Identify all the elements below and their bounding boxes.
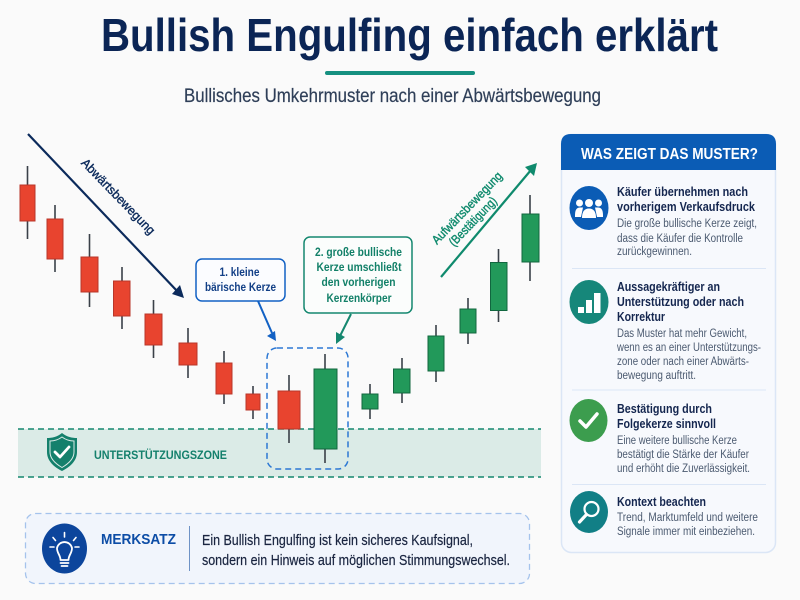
item: bestätigung: Bestätigung durch	[617, 402, 712, 416]
item: aussagekräftiger	[570, 280, 761, 382]
subtitle: Bullisches Umkehrmuster nach einer Abwärtsbewegung	[184, 86, 601, 107]
panel: was zeigt das muster	[561, 134, 776, 552]
title underline	[325, 71, 475, 75]
panel header	[561, 134, 776, 170]
merksatz text: sondern ein Hinweis auf möglichen Stimmungswechsel.	[202, 553, 510, 569]
item: kontext: Trend, Marktumfeld und weitere	[617, 512, 758, 524]
icon: light bulb	[42, 524, 87, 574]
uptrend arrow	[441, 163, 537, 277]
item: aussagekräftiger: zone oder nach einer Abwärts-	[617, 356, 749, 368]
callout: small bearish candle	[196, 259, 285, 301]
item: kontext: Kontext beachten	[617, 495, 706, 509]
item: aussagekräftiger: Unterstützung oder nach	[617, 295, 744, 309]
bullish candles in uptrend	[362, 195, 539, 419]
callout: large bullish candle: Kerzenkörper	[326, 291, 392, 305]
panel header: WAS ZEIGT DAS MUSTER?	[581, 146, 758, 163]
item: bestätigung: und erhöht die Zuverlässigkeit.	[617, 463, 750, 475]
icon: bar chart	[570, 280, 608, 324]
item: käufer übernehmen: dass die Käufer die Kontrolle	[617, 233, 743, 245]
callout: small bearish candle: 1. kleine	[220, 265, 260, 279]
item: bestätigung: Eine weitere bullische Kerze	[617, 435, 737, 447]
icon: shield with check	[47, 433, 77, 471]
icon: people	[570, 186, 608, 230]
item: käufer übernehmen: Die große bullische Kerze zeigt,	[617, 218, 757, 230]
callout: large bullish candle: den vorherigen	[322, 275, 396, 289]
small bearish candle	[278, 375, 300, 443]
item: bestätigung	[570, 399, 750, 475]
icon: magnifier	[570, 491, 608, 533]
support zone	[18, 429, 541, 477]
engulfing highlight box	[267, 348, 348, 469]
item: käufer übernehmen: zurückgewinnen.	[617, 246, 692, 258]
callout: large bullish candle: Kerze umschließt	[316, 260, 402, 274]
item: kontext	[570, 491, 758, 538]
arrow: callout 2 to candle	[336, 314, 351, 344]
item: aussagekräftiger: Das Muster hat mehr Gewicht,	[617, 328, 747, 340]
arrow: callout 1 to candle	[258, 301, 276, 341]
panel: merksatz	[26, 514, 530, 584]
uptrend label: Aufwärtsbewegung	[429, 169, 505, 247]
callout: small bearish candle: bärische Kerze	[205, 280, 276, 294]
callout: large bullish candle	[304, 237, 412, 313]
merksatz text	[202, 533, 510, 569]
title: Bullish Engulfing einfach erklärt	[101, 9, 718, 61]
callout: large bullish candle: 2. große bullische	[315, 245, 402, 259]
uptrend label: (Bestätigung)	[446, 194, 500, 249]
item: käufer übernehmen	[570, 185, 757, 258]
item: aussagekräftiger: Korrektur	[617, 310, 665, 324]
large bullish engulfing candle	[314, 354, 337, 463]
item: käufer übernehmen: vorherigem Verkaufsdruck	[617, 200, 755, 214]
item: bestätigung: Folgekerze sinnvoll	[617, 417, 716, 431]
item: aussagekräftiger: Aussagekräftiger an	[617, 280, 720, 294]
icon: check	[570, 399, 608, 442]
item: aussagekräftiger: wenn es an einer Unterstützungs-	[616, 342, 761, 354]
item: kontext: Signale immer mit einbeziehen.	[617, 526, 755, 538]
item: käufer übernehmen: Käufer übernehmen nach	[617, 185, 748, 199]
downtrend label: Abwärtsbewegung	[78, 156, 158, 238]
downtrend arrow	[28, 134, 184, 298]
merksatz text: Ein Bullish Engulfing ist kein sicheres Kaufsignal,	[202, 533, 473, 549]
merksatz label: MERKSATZ	[101, 532, 176, 548]
bearish candles in downtrend	[20, 166, 260, 419]
support zone label: UNTERSTÜTZUNGSZONE	[94, 447, 227, 462]
item: bestätigung: bestätigt die Stärke der Käufer	[617, 449, 749, 461]
item: aussagekräftiger: bewegung auftritt.	[617, 370, 696, 382]
